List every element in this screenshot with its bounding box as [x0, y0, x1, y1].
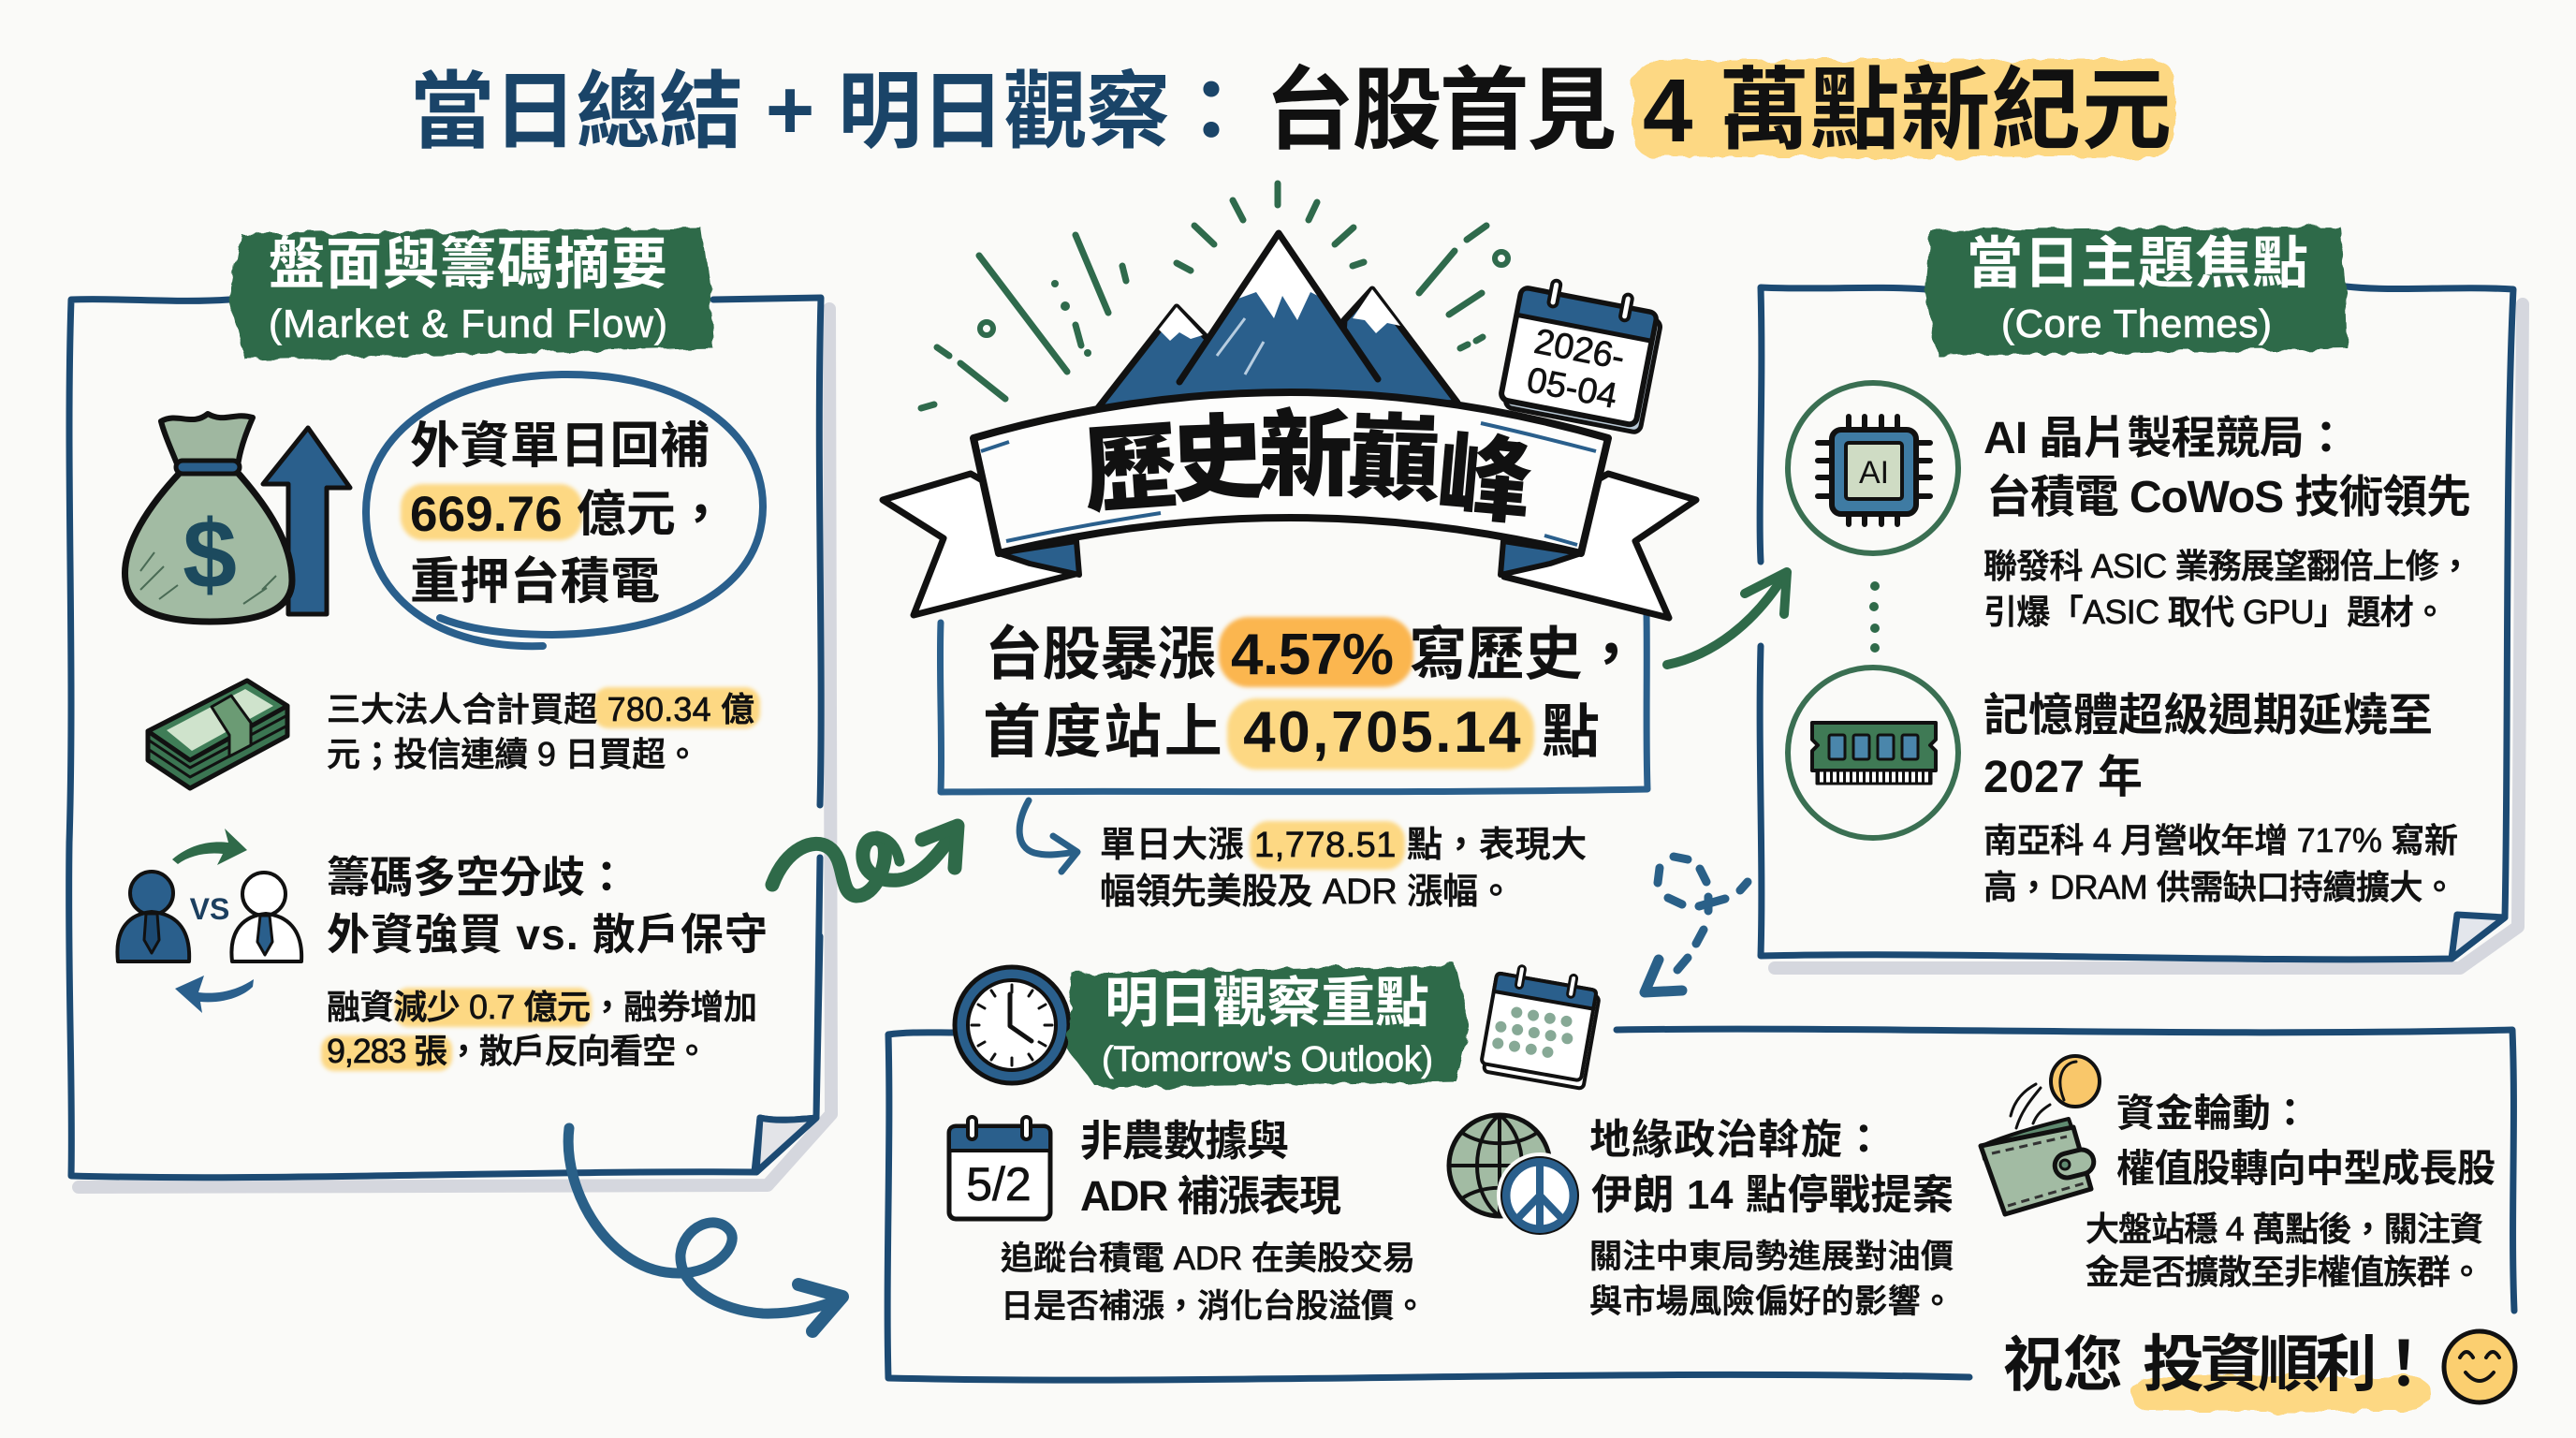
icon: foreign versus retail investors [117, 829, 301, 1013]
panel heading: market and fund flow: (Market & Fund Flow) [269, 301, 667, 345]
panel heading: core themes: 當日主題焦點 [1967, 232, 2308, 295]
text: memory supercycle: 記憶體超級週期延燒至 [1983, 691, 2433, 741]
callout: foreign investors buy: 669.76 億元， [410, 487, 725, 542]
headline text: 首度站上 40,705.14 點 [983, 700, 1600, 765]
text: nonfarm data [1001, 1117, 1427, 1325]
icon: date calendar 2026-05-04 [1499, 274, 1665, 433]
icon: wallet and coin [1981, 1056, 2100, 1214]
panel: core themes [1760, 227, 2523, 968]
panel heading: core themes: (Core Themes) [2001, 301, 2272, 345]
title: 4 萬點新紀元 [1643, 61, 2172, 161]
arrow: headline to detail [1019, 800, 1077, 872]
panel: headline box [940, 613, 1647, 792]
text: chip divergence: 融資減少 0.7 億元，融券增加 [327, 988, 757, 1026]
text: capital rotation: 大盤站穩 4 萬點後，關注資 [2086, 1210, 2483, 1248]
text: nonfarm data: 非農數據與 [1080, 1117, 1289, 1165]
text: AI chip process race: 引爆「ASIC 取代 GPU」題材。 [1983, 593, 2447, 631]
text: capital rotation: 權值股轉向中型成長股 [2116, 1147, 2496, 1190]
arrow: dashed to outlook [1645, 857, 1748, 992]
callout: foreign investors buy: 外資單日回補 [410, 418, 710, 474]
icon: date calendar 2026-05-04: 05-04 [1524, 360, 1620, 417]
icon: money bag with up arrow: $ [183, 501, 237, 609]
icon: foreign versus retail investors: VS [190, 892, 229, 926]
icon: tomorrow calendar [1480, 961, 1603, 1089]
decoration: burst rays [921, 183, 1508, 408]
title: 明日觀察： [838, 66, 1253, 159]
banner: new historic peak: 新 [1259, 404, 1353, 508]
panel: tomorrow outlook [887, 961, 2514, 1380]
text: institutional investors [327, 687, 760, 773]
arrow: green to core themes [1667, 572, 1787, 665]
text: daily gain detail: 幅領先美股及 ADR 漲幅。 [1100, 873, 1514, 912]
panel heading: tomorrow outlook: (Tomorrow's Outlook) [1102, 1040, 1433, 1079]
icon: mountains [1097, 233, 1457, 412]
text: geopolitics: 地緣政治斡旋： [1589, 1117, 1884, 1163]
text: chip divergence [321, 853, 768, 1071]
text: institutional investors: 元；投信連續 9 日買超。 [327, 735, 699, 773]
item: nonfarm data and ADR [949, 1117, 1427, 1325]
text: memory supercycle [1983, 691, 2458, 906]
text: daily gain detail: 單日大漲 1,778.51 點，表現大 [1100, 826, 1587, 865]
text: chip divergence: 9,283 張，散戶反向看空。 [327, 1032, 709, 1070]
panel heading: market and fund flow: 盤面與籌碼摘要 [269, 233, 667, 296]
text: memory supercycle: 2027 年 [1983, 753, 2143, 802]
closing message [2003, 1329, 2435, 1412]
panel: market and fund flow [69, 228, 831, 1187]
text: chip divergence: 籌碼多空分歧： [327, 853, 628, 902]
arrow: blue loop to outlook panel [568, 1128, 842, 1331]
text: AI chip process race: 台積電 CoWoS 技術領先 [1986, 473, 2471, 522]
icon: memory module [1788, 668, 1958, 838]
title: + [766, 64, 814, 157]
text: nonfarm data: 追蹤台積電 ADR 在美股交易 [1001, 1240, 1415, 1277]
banner: new historic peak [883, 392, 1696, 618]
headline text [983, 623, 1640, 765]
title: 台股首見 [1265, 61, 1617, 161]
highlight: index level [1227, 698, 1534, 770]
text: AI chip process race [1983, 414, 2472, 631]
icon: smiling face [2444, 1331, 2515, 1402]
text: geopolitics: 伊朗 14 點停戰提案 [1591, 1172, 1954, 1218]
panel heading: tomorrow outlook: 明日觀察重點 [1105, 973, 1429, 1034]
text: institutional investors: 三大法人合計買超 780.34 億 [327, 690, 754, 728]
text: nonfarm data: ADR 補漲表現 [1080, 1172, 1341, 1220]
text: capital rotation [2086, 1092, 2496, 1291]
callout: foreign investors buy: 重押台積電 [410, 554, 660, 609]
icon: AI chip [1788, 383, 1958, 553]
item: geopolitics [1449, 1115, 1954, 1320]
text: memory supercycle: 南亞科 4 月營收年增 717% 寫新 [1983, 821, 2458, 859]
arrow: green squiggle to centre [772, 826, 958, 896]
panel heading: market and fund flow [230, 228, 713, 360]
icon: date calendar 2026-05-04: 2026- [1531, 322, 1628, 378]
text: AI chip process race: 聯發科 ASIC 業務展望翻倍上修， [1983, 547, 2472, 585]
text: chip divergence: 外資強買 vs. 散戶保守 [327, 910, 768, 959]
icon: calendar 5/2 [949, 1117, 1050, 1219]
banner: new historic peak: 歷 [1080, 415, 1181, 525]
icon: money bag with up arrow [124, 414, 350, 622]
highlight: gain percent [1219, 617, 1413, 687]
banner: new historic peak: 史 [1169, 405, 1266, 514]
banner: new historic peak: 巔 [1345, 405, 1442, 514]
connector dots [1869, 581, 1880, 653]
icon: banknote stack [148, 681, 287, 788]
text: geopolitics [1589, 1117, 1954, 1320]
panel heading: tomorrow outlook [1067, 964, 1470, 1088]
callout: foreign investors buy [366, 374, 763, 646]
text: capital rotation: 資金輪動： [2116, 1092, 2309, 1135]
title [410, 60, 2174, 161]
closing message: 祝您 [2003, 1331, 2123, 1399]
headline text: 台股暴漲 4.57% 寫歷史， [985, 623, 1640, 687]
text: geopolitics: 與市場風險偏好的影響。 [1589, 1284, 1954, 1320]
banner: new historic peak: 峰 [1433, 424, 1536, 536]
icon: AI chip: AI [1859, 455, 1889, 491]
text: memory supercycle: 高，DRAM 供需缺口持續擴大。 [1983, 868, 2456, 906]
text: daily gain detail [1100, 821, 1587, 912]
text: nonfarm data: 日是否補漲，消化台股溢價。 [1001, 1288, 1427, 1325]
text: AI chip process race: AI 晶片製程競局： [1983, 414, 2349, 463]
panel heading: core themes [1925, 227, 2348, 356]
closing message: 投資順利！ [2143, 1329, 2435, 1399]
text: geopolitics: 關注中東局勢進展對油價 [1589, 1239, 1954, 1275]
icon: clock [955, 967, 1069, 1083]
text: capital rotation: 金是否擴散至非權值族群。 [2086, 1253, 2483, 1291]
title: 當日總結 [410, 66, 743, 159]
icon: globe with peace sign [1449, 1115, 1583, 1239]
icon: calendar 5/2: 5/2 [966, 1158, 1032, 1211]
item: capital rotation [1981, 1056, 2496, 1291]
